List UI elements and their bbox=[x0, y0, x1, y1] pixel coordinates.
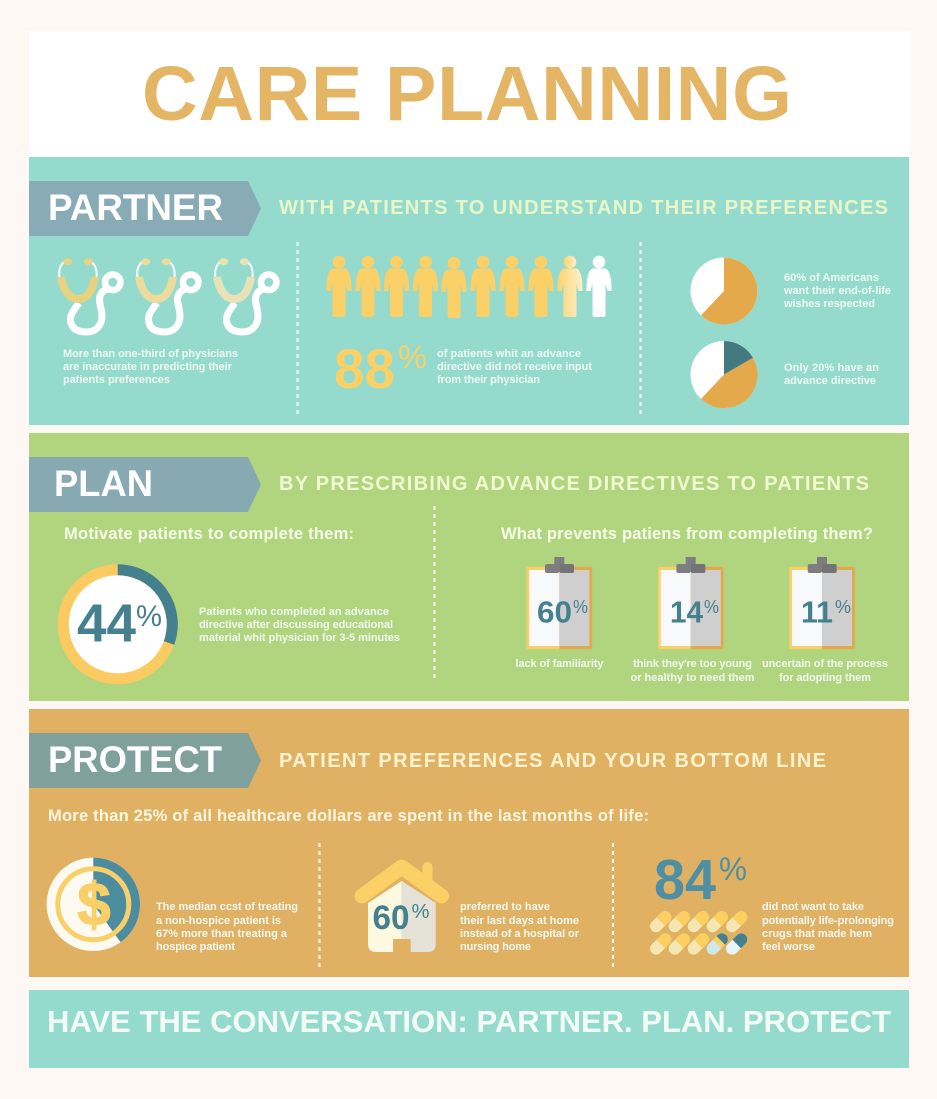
protect background bbox=[29, 709, 909, 977]
home preference text: instead of a hospital or bbox=[460, 928, 580, 940]
stat: 88 percent: % bbox=[398, 339, 427, 375]
plan subheading: BY PRESCRIBING ADVANCE DIRECTIVES TO PATIENTS bbox=[279, 473, 869, 495]
physicians text: patients preferences bbox=[63, 374, 170, 386]
panel: protect bbox=[29, 709, 909, 977]
donut description: Patients who completed an advance bbox=[199, 606, 389, 618]
clipboard: 11 percent: % bbox=[835, 597, 851, 617]
physicians text bbox=[63, 348, 238, 386]
drugs text: did not want to take bbox=[762, 901, 864, 913]
median cost text: 67% more than treating a bbox=[156, 928, 288, 940]
stat: 84 percent: 84 bbox=[654, 848, 716, 912]
panel: plan bbox=[29, 433, 909, 701]
donut description bbox=[199, 606, 400, 644]
20 percent text: advance directive bbox=[784, 375, 876, 387]
donut chart: 44 percent bbox=[63, 570, 172, 679]
clipboard: 14 percent: % bbox=[704, 597, 719, 617]
icon: pills bbox=[648, 909, 750, 957]
pie chart: 60 percent bbox=[690, 258, 758, 324]
60 percent of Americans text bbox=[783, 272, 891, 310]
advance directive input text: from their physician bbox=[437, 374, 540, 386]
partner subheading: WITH PATIENTS TO UNDERSTAND THEIR PREFERENCES bbox=[279, 197, 888, 219]
caption: lack of familiarity: lack of familiarity bbox=[516, 658, 604, 670]
clipboard: 14 percent: 14 bbox=[670, 594, 704, 629]
protect subheading: PATIENT PREFERENCES AND YOUR BOTTOM LINE bbox=[279, 750, 826, 772]
home preference text: preferred to have bbox=[460, 901, 550, 913]
caption: uncertain bbox=[762, 658, 888, 684]
clipboard: 60 percent: % bbox=[573, 597, 588, 617]
60 percent of Americans text: wishes respected bbox=[783, 298, 875, 310]
home preference text: their last days at home bbox=[460, 915, 579, 927]
donut chart: 44 percent: 44 bbox=[77, 594, 136, 654]
caption: too young bbox=[630, 658, 755, 684]
stat: 84 percent: % bbox=[719, 851, 747, 887]
footer banner: HAVE THE CONVERSATION: PARTNER. PLAN. PROTECT bbox=[47, 1004, 891, 1039]
clipboard: 11 percent: 11 bbox=[801, 594, 833, 629]
motivate heading: Motivate patients to complete them: bbox=[64, 525, 354, 543]
what prevents heading: What prevents patiens from completing them? bbox=[501, 525, 873, 543]
donut description: material whit physician for 3-5 minutes bbox=[199, 632, 400, 644]
stat: 84 percent bbox=[654, 848, 747, 912]
plan background bbox=[29, 433, 909, 701]
advance directive input text: directive did not receive input bbox=[437, 361, 592, 373]
donut description: directive after discussing educational bbox=[199, 619, 393, 631]
plan banner: PLAN bbox=[54, 463, 153, 504]
partner banner: PARTNER bbox=[48, 187, 223, 228]
drugs text: feel worse bbox=[762, 941, 815, 953]
protect banner: PROTECT bbox=[48, 739, 222, 780]
protect banner bbox=[29, 733, 261, 788]
drugs text: crugs that made hem bbox=[762, 928, 872, 940]
caption: uncertain: for adopting them bbox=[779, 672, 871, 684]
clipboard: 60 percent bbox=[527, 557, 592, 649]
20 percent text: Only 20% have an bbox=[784, 362, 879, 374]
icon: house with 60 percent: % bbox=[412, 901, 430, 923]
icon: dollar coin: $ bbox=[78, 871, 110, 938]
median cost text: hospice patient bbox=[156, 941, 235, 953]
icon: dollar coin bbox=[47, 858, 140, 951]
footer banner bbox=[29, 990, 909, 1068]
icon: house with 60 percent bbox=[362, 867, 442, 952]
healthcare dollars heading: More than 25% of all healthcare dollars are spent in the last months of life: bbox=[48, 807, 649, 825]
drugs text: potentially life-prolonging bbox=[762, 915, 894, 927]
clipboard: 60 percent: 60 bbox=[537, 594, 572, 629]
plan banner bbox=[29, 457, 261, 512]
advance directive input text bbox=[437, 348, 592, 386]
pie chart: 20 percent bbox=[690, 341, 758, 408]
median cost text: a non-hospice patient is bbox=[156, 915, 281, 927]
icon: stethoscopes bbox=[59, 258, 276, 332]
partner banner bbox=[29, 181, 261, 236]
home preference text: nursing home bbox=[460, 941, 531, 953]
caption: uncertain: uncertain of the process bbox=[762, 658, 888, 670]
title banner: CARE PLANNING bbox=[142, 51, 792, 137]
drugs text bbox=[762, 901, 894, 953]
caption: too young: or healthy to need them bbox=[630, 672, 755, 684]
clipboard: 11 percent bbox=[789, 557, 855, 649]
clipboard: 14 percent bbox=[658, 557, 724, 649]
stat: 88 percent: 88 bbox=[334, 337, 395, 400]
icon: house with 60 percent: 60 bbox=[372, 899, 410, 937]
advance directive input text: of patients whit an advance bbox=[437, 348, 581, 360]
stat: 88 percent bbox=[334, 337, 427, 400]
caption: too young: think they're too young bbox=[633, 658, 752, 670]
physicians text: are inaccurate in predicting their bbox=[63, 361, 233, 373]
median cost text: The median ccst of treating bbox=[156, 901, 298, 913]
physicians text: More than one-third of physicians bbox=[63, 348, 238, 360]
60 percent of Americans text: want their end-of-life bbox=[783, 285, 891, 297]
donut chart: 44 percent: % bbox=[136, 600, 162, 633]
panel: partner bbox=[29, 157, 909, 425]
home preference text bbox=[460, 901, 580, 953]
60 percent of Americans text: 60% of Americans bbox=[784, 272, 879, 284]
median cost text bbox=[156, 901, 298, 953]
20 percent text bbox=[784, 362, 879, 387]
icon: row of ten doctors bbox=[326, 256, 612, 318]
partner background bbox=[29, 157, 909, 425]
title banner bbox=[29, 31, 911, 157]
